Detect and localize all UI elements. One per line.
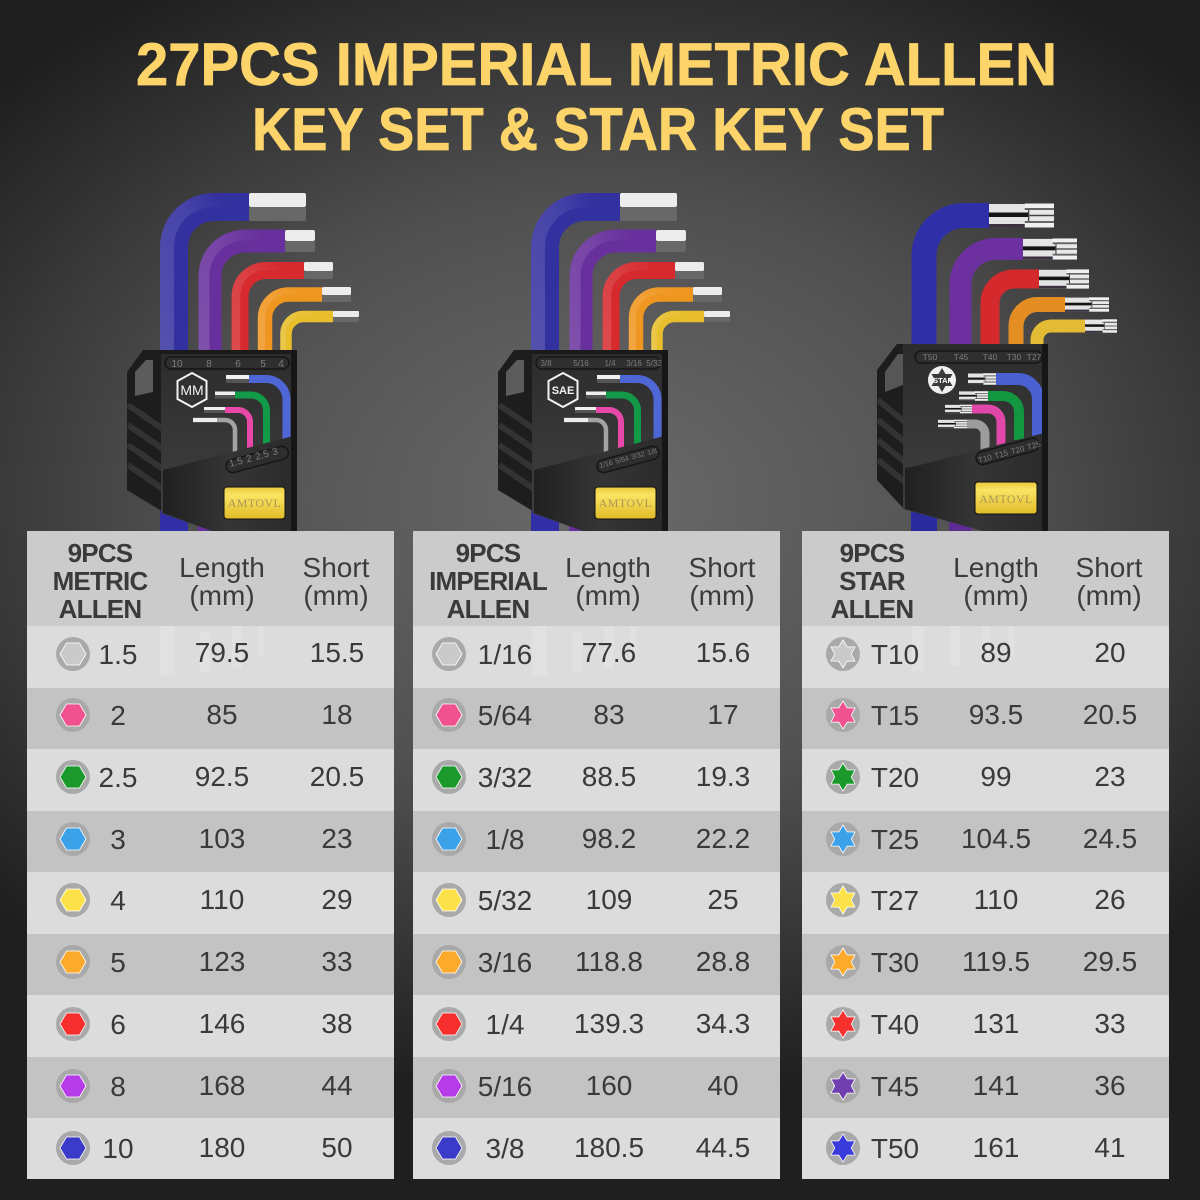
row T40: 33 xyxy=(1094,1008,1126,1039)
top size labels: 3/16 xyxy=(626,359,642,368)
table header: (mm) xyxy=(963,580,1029,611)
row T30 xyxy=(802,934,1169,995)
row 3/8 xyxy=(413,1118,780,1179)
table header xyxy=(413,531,780,626)
table header: Short xyxy=(689,552,756,583)
top size labels: T45 xyxy=(954,352,969,362)
table header xyxy=(802,531,1169,626)
row 3/16: 118.8 xyxy=(575,946,643,977)
row 1/4: 34.3 xyxy=(696,1008,750,1039)
panel: metric allen table xyxy=(27,531,394,1179)
row 2: 2 xyxy=(110,700,126,731)
panel: imperial allen table xyxy=(413,531,780,1179)
row 4: 4 xyxy=(110,885,126,916)
row 2: 18 xyxy=(321,699,353,730)
row 5/64 xyxy=(413,688,780,749)
table header: (mm) xyxy=(189,580,255,611)
row T25: T25 xyxy=(871,824,919,855)
table header: Short xyxy=(303,552,370,583)
row T10 xyxy=(802,626,1169,688)
table header: STAR xyxy=(839,566,906,596)
bottom size labels: T10 T15 T20 T25 xyxy=(977,439,1042,465)
row T27: T27 xyxy=(871,885,919,916)
table header: IMPERIAL xyxy=(429,566,548,596)
row 4: 29 xyxy=(321,884,353,915)
top size labels xyxy=(923,352,1042,362)
row T15: 93.5 xyxy=(969,699,1023,730)
row 3: 3 xyxy=(110,824,126,855)
table header: Length xyxy=(953,552,1039,583)
table header: Short xyxy=(1076,552,1143,583)
row 5/16: 40 xyxy=(707,1070,739,1101)
row 1.5 xyxy=(27,626,394,688)
row 1/4: 1/4 xyxy=(486,1009,524,1040)
table header: 9PCS xyxy=(68,538,133,568)
row 5/64: 83 xyxy=(593,699,625,730)
row 4: 110 xyxy=(200,884,244,915)
row T15: 20.5 xyxy=(1083,699,1137,730)
top size labels: T30 xyxy=(1007,352,1022,362)
bottom size labels: 1/16 5/64 3/32 1/8 xyxy=(599,448,658,470)
row 8: 168 xyxy=(199,1070,245,1101)
row 5/16 xyxy=(413,1057,780,1118)
row 5/32: 5/32 xyxy=(478,885,532,916)
row T20 xyxy=(802,749,1169,811)
row 8: 44 xyxy=(321,1070,353,1101)
row 3: 103 xyxy=(199,823,245,854)
row 8 xyxy=(27,1057,394,1118)
imperial hex key set with holder xyxy=(498,193,730,531)
row 6 xyxy=(27,995,394,1057)
row 1/16: 15.6 xyxy=(696,637,750,668)
row 3/32 xyxy=(413,749,780,811)
table header: 9PCS xyxy=(840,538,905,568)
top size labels: 5 xyxy=(260,359,266,370)
row 5/32 xyxy=(413,872,780,934)
table header: Length xyxy=(179,552,265,583)
row 1.5: 79.5 xyxy=(195,637,249,668)
metric hex key set with holder xyxy=(127,193,359,531)
icon: SAE hexagon badge xyxy=(548,373,578,407)
row T30: 29.5 xyxy=(1083,946,1137,977)
row 5/32: 109 xyxy=(586,884,632,915)
row T20: T20 xyxy=(871,762,919,793)
row 1/8: 1/8 xyxy=(486,824,524,855)
icon: STAR badge: STAR xyxy=(933,376,954,385)
table header: (mm) xyxy=(689,580,755,611)
brand plate: AMTOVL xyxy=(228,496,281,510)
row 5: 5 xyxy=(110,947,126,978)
row 5/64: 5/64 xyxy=(478,700,532,731)
row T10: 20 xyxy=(1094,637,1126,668)
row T45 xyxy=(802,1057,1169,1118)
brand plate: AMTOVL xyxy=(599,496,652,510)
row T45: T45 xyxy=(871,1071,919,1102)
title xyxy=(136,31,1057,163)
top size labels: 5/32 xyxy=(646,359,662,368)
row 10: 50 xyxy=(321,1132,353,1163)
top size labels: 10 xyxy=(171,359,183,370)
row 3/16: 28.8 xyxy=(696,946,750,977)
top size labels: 5/16 xyxy=(573,359,589,368)
row T50: 41 xyxy=(1094,1132,1126,1163)
top size labels: 8 xyxy=(206,359,212,370)
row T25 xyxy=(802,811,1169,872)
panel: star allen table xyxy=(802,531,1169,1179)
row 3 xyxy=(27,811,394,872)
icon: STAR badge xyxy=(928,366,956,394)
row T25: 24.5 xyxy=(1083,823,1137,854)
top size labels xyxy=(171,359,284,370)
top size labels: 6 xyxy=(235,359,241,370)
row T27: 110 xyxy=(974,884,1018,915)
row 1/8 xyxy=(413,811,780,872)
table header: (mm) xyxy=(303,580,369,611)
row T40 xyxy=(802,995,1169,1057)
top size labels: 1/4 xyxy=(604,359,616,368)
row 1/16: 77.6 xyxy=(582,637,636,668)
row 6: 6 xyxy=(110,1009,126,1040)
row 1/4 xyxy=(413,995,780,1057)
row 2.5 xyxy=(27,749,394,811)
row 5/16: 160 xyxy=(586,1070,632,1101)
row T20: 23 xyxy=(1094,761,1126,792)
row 10 xyxy=(27,1118,394,1179)
row 10: 180 xyxy=(199,1132,245,1163)
title: KEY SET & STAR KEY SET xyxy=(252,96,944,163)
icon: MM hexagon badge: MM xyxy=(180,382,204,398)
row T10: 89 xyxy=(980,637,1012,668)
row 3/8: 44.5 xyxy=(696,1132,750,1163)
table header: 9PCS xyxy=(456,538,521,568)
row T30: T30 xyxy=(871,947,919,978)
row 3/8: 180.5 xyxy=(574,1132,644,1163)
row T45: 141 xyxy=(973,1070,1019,1101)
row T10: T10 xyxy=(871,639,919,670)
row T30: 119.5 xyxy=(962,946,1030,977)
row T45: 36 xyxy=(1094,1070,1126,1101)
icon: SAE hexagon badge: SAE xyxy=(552,385,574,397)
row 5: 33 xyxy=(321,946,353,977)
row 5/32: 25 xyxy=(707,884,739,915)
row 4 xyxy=(27,872,394,934)
row T50: T50 xyxy=(871,1133,919,1164)
table header: (mm) xyxy=(575,580,641,611)
row 3/16: 3/16 xyxy=(478,947,532,978)
row 3/8: 3/8 xyxy=(486,1133,524,1164)
row 2.5: 20.5 xyxy=(310,761,364,792)
row T40: 131 xyxy=(973,1008,1019,1039)
row 1.5: 1.5 xyxy=(99,639,137,670)
small star keys xyxy=(938,373,1038,450)
row T50: 161 xyxy=(973,1132,1019,1163)
row T50 xyxy=(802,1118,1169,1179)
row 10: 10 xyxy=(102,1133,134,1164)
row 2: 85 xyxy=(206,699,238,730)
star key set with holder xyxy=(877,204,1117,531)
row 1/4: 139.3 xyxy=(574,1008,644,1039)
table header: METRIC xyxy=(53,566,148,596)
table header: Length xyxy=(565,552,651,583)
top size labels: T40 xyxy=(983,352,998,362)
row T15 xyxy=(802,688,1169,749)
row 3/32: 3/32 xyxy=(478,762,532,793)
row 3/16 xyxy=(413,934,780,995)
row 1/16 xyxy=(413,626,780,688)
row 2.5: 92.5 xyxy=(195,761,249,792)
table header: (mm) xyxy=(1076,580,1142,611)
row 6: 38 xyxy=(321,1008,353,1039)
row 3: 23 xyxy=(321,823,353,854)
row 3/32: 19.3 xyxy=(696,761,750,792)
row 5 xyxy=(27,934,394,995)
row 1/8: 22.2 xyxy=(696,823,750,854)
row 1/8: 98.2 xyxy=(582,823,636,854)
row T40: T40 xyxy=(871,1009,919,1040)
table header: ALLEN xyxy=(447,594,529,624)
row 5/16: 5/16 xyxy=(478,1071,532,1102)
row T27 xyxy=(802,872,1169,934)
row T15: T15 xyxy=(871,700,919,731)
top size labels: 4 xyxy=(278,359,284,370)
row 2 xyxy=(27,688,394,749)
top size labels: T27 xyxy=(1027,352,1042,362)
row 1.5: 15.5 xyxy=(310,637,364,668)
table header xyxy=(27,531,394,626)
title: 27PCS IMPERIAL METRIC ALLEN xyxy=(136,31,1057,98)
top size labels xyxy=(540,359,662,368)
row T27: 26 xyxy=(1094,884,1126,915)
row T20: 99 xyxy=(980,761,1012,792)
table header: ALLEN xyxy=(59,594,141,624)
row T25: 104.5 xyxy=(961,823,1031,854)
row 1/16: 1/16 xyxy=(478,639,532,670)
top size labels: T50 xyxy=(923,352,938,362)
row 8: 8 xyxy=(110,1071,126,1102)
bottom size labels: 1.5 2 2.5 3 xyxy=(228,446,280,470)
top size labels: 3/8 xyxy=(540,359,552,368)
row 5/64: 17 xyxy=(707,699,739,730)
table header: ALLEN xyxy=(831,594,913,624)
row 5: 123 xyxy=(199,946,245,977)
row 3/32: 88.5 xyxy=(582,761,636,792)
row 6: 146 xyxy=(199,1008,245,1039)
icon: MM hexagon badge xyxy=(178,373,206,407)
brand plate: AMTOVL xyxy=(979,492,1033,506)
row 2.5: 2.5 xyxy=(99,762,137,793)
